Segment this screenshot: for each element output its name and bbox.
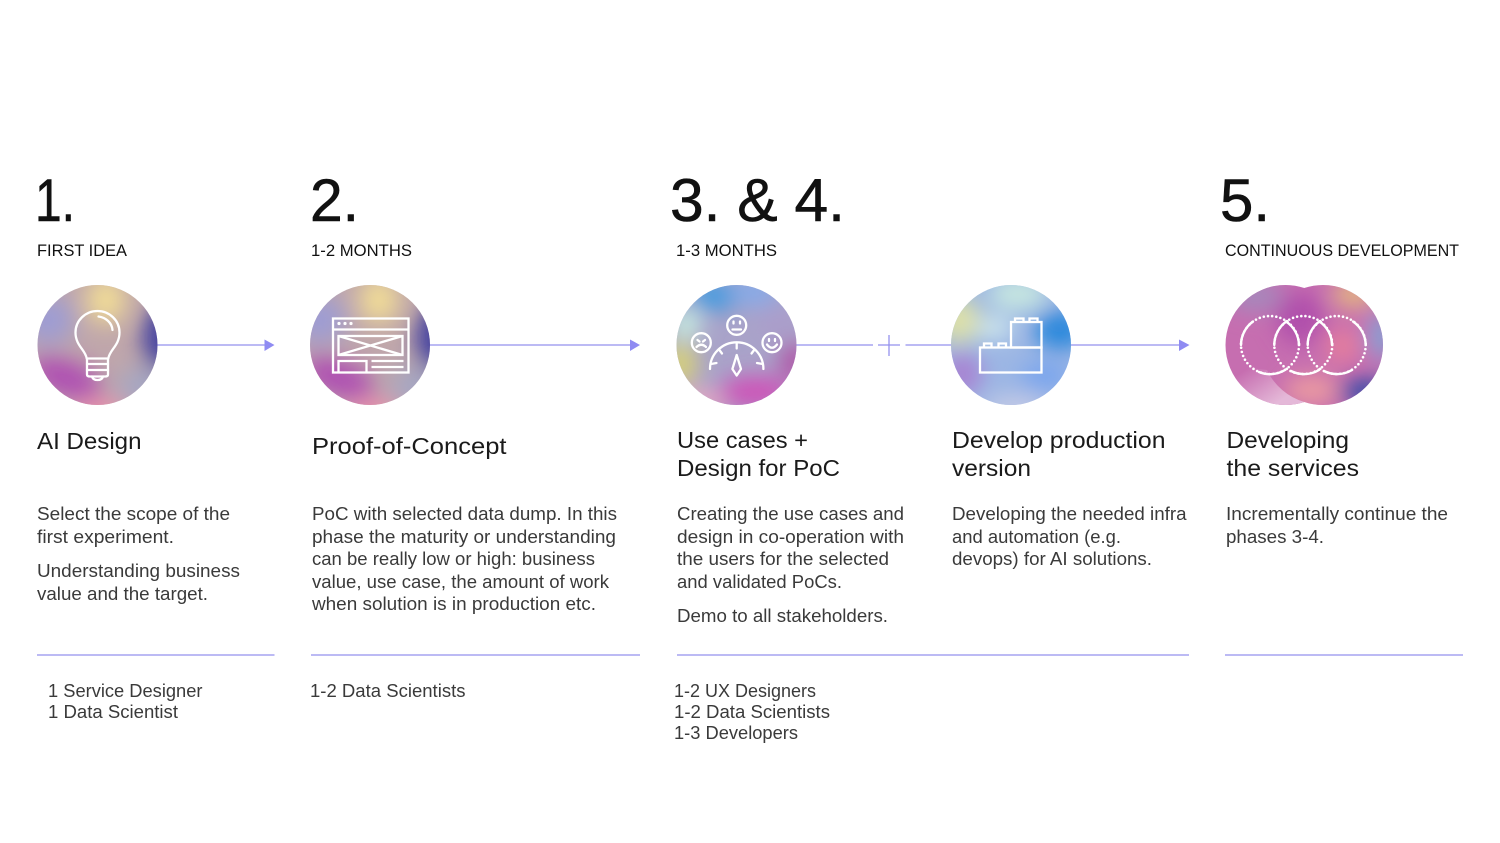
arrow: step 2 to step 3	[430, 340, 640, 351]
heading: step 1 number: 1.	[35, 167, 75, 234]
team: steps 3 and 4 roles: 1-3 Developers	[674, 723, 798, 743]
title: Develop production version	[952, 427, 1166, 481]
text: AI Design description: Understanding business	[37, 561, 240, 581]
text: AI Design description: Select the scope of the	[37, 504, 230, 524]
text: production version description: devops) for AI solutions.	[952, 549, 1152, 569]
team: step 1 roles: 1 Data Scientist	[48, 702, 178, 722]
text: Proof-of-Concept description: can be really low or high: business	[312, 549, 595, 569]
label: 1-2 months: 1-2 MONTHS	[311, 242, 412, 260]
team: steps 3 and 4 roles	[674, 681, 830, 743]
text: Use cases description: design in co-operation with	[677, 527, 904, 547]
team: step 1 roles	[48, 681, 202, 722]
icon: building bricks in gradient circle	[951, 285, 1071, 405]
title: Proof-of-Concept: Proof-of-Concept	[312, 433, 507, 459]
text: production version description	[952, 504, 1188, 569]
icon: light bulb in gradient circle	[38, 285, 158, 405]
text: developing services description: Incrementally continue the	[1226, 504, 1448, 524]
text: Use cases description: Demo to all stakeholders.	[677, 606, 888, 626]
text: Use cases description: Creating the use cases and	[677, 504, 904, 524]
title: AI Design: AI Design	[37, 428, 142, 454]
text: AI Design description: first experiment.	[37, 527, 174, 547]
text: Use cases description: the users for the selected	[677, 549, 889, 569]
text: Proof-of-Concept description: phase the maturity or understanding	[312, 527, 616, 547]
text: production version description: and automation (e.g.	[952, 527, 1121, 547]
title: Developing the services: the services	[1226, 455, 1359, 481]
heading: steps 3 and 4 number: 3. & 4.	[670, 167, 845, 234]
icon: satisfaction gauge in gradient circle	[676, 285, 796, 405]
text: Proof-of-Concept description: when solution is in production etc.	[311, 594, 596, 614]
title: Develop production version: Develop production	[952, 427, 1166, 453]
text: developing services description	[1226, 504, 1448, 547]
heading: step 2 number: 2.	[310, 167, 359, 234]
label: 1-3 months: 1-3 MONTHS	[676, 242, 777, 260]
text: AI Design description: value and the target.	[37, 584, 208, 604]
team: step 2 roles: 1-2 Data Scientists	[310, 681, 466, 701]
arrow: step 4 to step 5	[1070, 340, 1190, 351]
team: steps 3 and 4 roles: 1-2 Data Scientists	[674, 702, 830, 722]
title: Use cases + Design for PoC	[677, 427, 840, 481]
arrow: step 1 to step 2	[157, 340, 274, 351]
title: Developing the services	[1226, 427, 1359, 481]
team: steps 3 and 4 roles: 1-2 UX Designers	[674, 681, 816, 701]
title: Developing the services: Developing	[1226, 427, 1349, 453]
title: Develop production version: version	[952, 455, 1031, 481]
connector: plus between step 3 and step 4	[796, 335, 952, 356]
text: developing services description: phases 3-4.	[1226, 527, 1324, 547]
text: Proof-of-Concept description: value, use case, the amount of work	[312, 572, 610, 592]
icon: browser wireframe in gradient circle	[310, 285, 430, 405]
text: production version description: Developing the needed infra	[952, 504, 1188, 524]
label: first idea: FIRST IDEA	[37, 242, 127, 260]
text: Proof-of-Concept description	[311, 504, 617, 614]
title: Use cases + Design for PoC: Design for PoC	[677, 455, 840, 481]
team: step 1 roles: 1 Service Designer	[48, 681, 202, 701]
text: Use cases description: and validated PoCs.	[677, 572, 842, 592]
title: Use cases + Design for PoC: Use cases +	[677, 427, 808, 453]
icon: overlapping rings in double gradient circle	[1226, 285, 1383, 405]
text: Proof-of-Concept description: PoC with selected data dump. In this	[312, 504, 617, 524]
label: continuous development: CONTINUOUS DEVELOPMENT	[1225, 242, 1459, 260]
text: AI Design description	[37, 504, 240, 604]
heading: step 5 number: 5.	[1220, 167, 1270, 234]
text: Use cases description	[677, 504, 904, 626]
